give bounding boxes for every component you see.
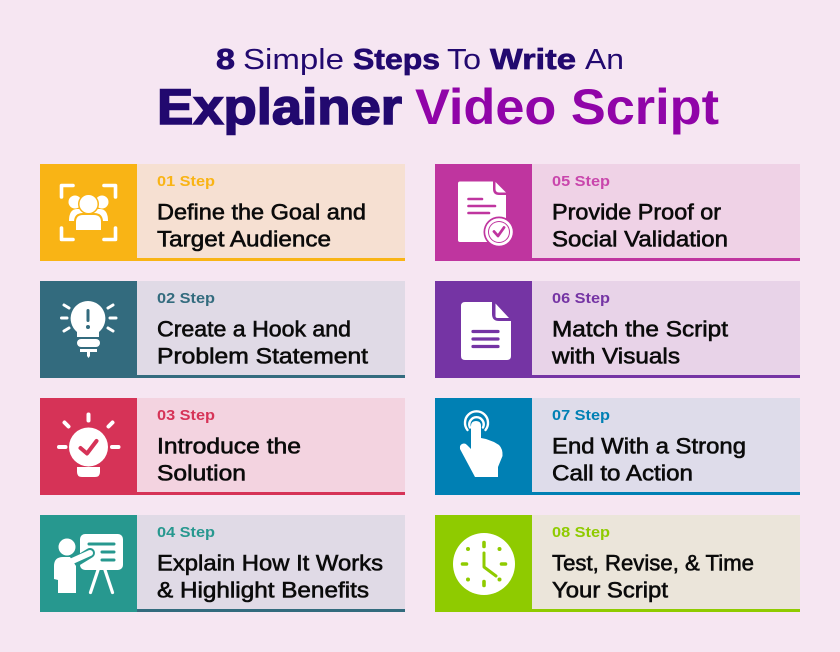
step heading — [157, 434, 301, 486]
title line 2: Video Script — [415, 79, 719, 135]
step label: 08 Step — [552, 524, 610, 541]
step heading: Provide Proof or — [552, 200, 721, 224]
title line 1: To — [447, 44, 481, 76]
step heading — [551, 316, 728, 368]
step heading: Call to Action — [552, 460, 693, 486]
step heading — [157, 200, 366, 252]
icon: presenter at a board — [54, 534, 123, 593]
title line 2 — [157, 79, 719, 135]
step heading: with Visuals — [551, 344, 680, 368]
title line 1: An — [585, 44, 624, 76]
title line 1: 8 — [216, 44, 235, 76]
step label: 03 Step — [157, 407, 215, 424]
title line 1: Steps — [353, 44, 440, 76]
title line 1 — [216, 44, 624, 76]
step heading — [552, 200, 728, 252]
title line 2: Explainer — [157, 79, 402, 135]
step heading: Explain How It Works — [157, 550, 383, 576]
step label: 04 Step — [157, 524, 215, 541]
step heading: Introduce the — [157, 434, 301, 458]
panel: step 03 — [40, 398, 405, 495]
step label: 05 Step — [552, 173, 610, 190]
step heading: Create a Hook and — [157, 316, 351, 342]
step heading: Your Script — [552, 578, 668, 602]
panel: step 08 — [435, 515, 800, 612]
panel: step 02 — [40, 281, 405, 378]
step heading: Solution — [157, 460, 246, 486]
step heading: Define the Goal and — [157, 200, 366, 224]
step label: 01 Step — [157, 173, 215, 190]
step label: 02 Step — [157, 290, 215, 307]
icon: clock — [453, 533, 515, 595]
panel: step 05 — [435, 164, 800, 261]
step heading — [157, 550, 383, 602]
step label: 06 Step — [552, 290, 610, 307]
step heading: Test, Revise, & Time — [552, 550, 754, 576]
panel: step 07 — [435, 398, 800, 495]
icon: document with check badge — [458, 182, 514, 248]
title — [157, 44, 719, 135]
step heading: Problem Statement — [157, 344, 368, 368]
icon: tapping hand — [460, 411, 503, 477]
icon: audience in focus frame — [62, 186, 116, 240]
panel: step 06 — [435, 281, 800, 378]
step heading: & Highlight Benefits — [157, 578, 369, 602]
title line 1: Simple — [243, 44, 344, 76]
step label: 07 Step — [552, 407, 610, 424]
step heading — [157, 316, 368, 368]
step heading — [552, 434, 746, 486]
step heading: Target Audience — [157, 226, 331, 252]
panel: step 04 — [40, 515, 405, 612]
step heading: Social Validation — [552, 226, 728, 252]
panel: step 01 — [40, 164, 405, 261]
icon: document with text lines — [461, 302, 511, 360]
title line 1: Write — [490, 44, 576, 76]
step heading — [552, 550, 754, 602]
step heading: Match the Script — [552, 316, 728, 342]
icon: light bulb with exclamation mark — [62, 301, 116, 358]
icon: light bulb with check mark — [59, 414, 118, 477]
step heading: End With a Strong — [552, 434, 746, 458]
